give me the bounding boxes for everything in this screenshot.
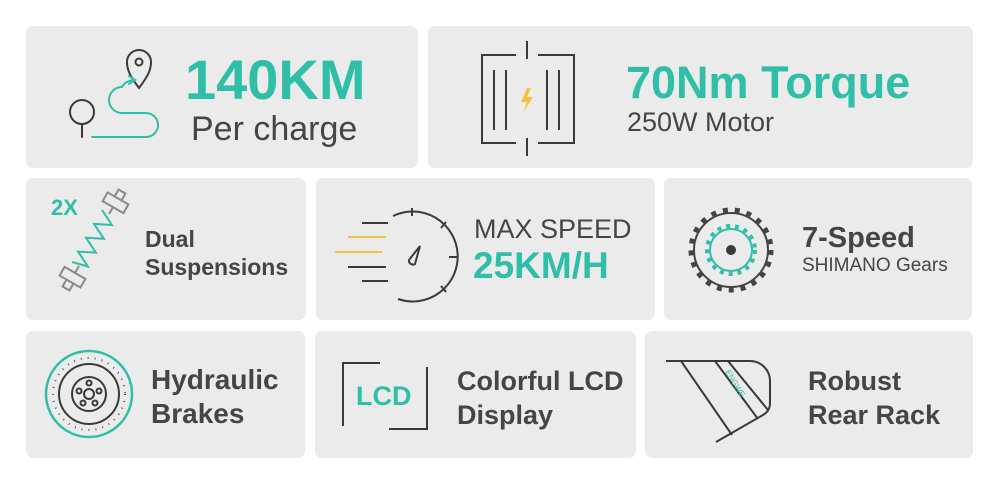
panel: LCD [315, 331, 636, 458]
panel: brakes [26, 331, 305, 458]
text: Dual Suspensions: Dual [145, 226, 195, 252]
icon: speedometer [335, 208, 459, 302]
text: Dual Suspensions [145, 226, 288, 280]
text: Colorful LCD Display: Display [457, 400, 553, 430]
heading: 70Nm Torque: 70Nm Torque [626, 57, 910, 108]
text: Dual Suspensions: Suspensions [145, 254, 288, 280]
text: Colorful LCD Display [457, 366, 623, 430]
text: SHIMANO Gears: SHIMANO Gears [802, 255, 948, 276]
heading: 7-Speed: 7-Speed [802, 222, 915, 254]
text: Hydraulic Brakes [151, 364, 279, 429]
text: Hydraulic Brakes: Hydraulic [151, 364, 279, 395]
text: Hydraulic Brakes: Brakes [151, 398, 244, 429]
heading: 25KM/H: 25KM/H [473, 245, 609, 286]
text: 250W Motor: 250W Motor [627, 107, 774, 137]
icon: spring [58, 188, 130, 292]
icon: motor [481, 41, 575, 156]
text: Robust Rear Rack: Robust [808, 366, 901, 396]
icon: gear [688, 208, 774, 292]
icon: rack [666, 360, 771, 443]
icon: route [69, 49, 159, 138]
panel: rear rack [645, 331, 973, 458]
panel: torque [428, 26, 973, 168]
label: LCD: LCD [356, 381, 412, 411]
panel: gears [664, 178, 972, 320]
text: MAX SPEED: MAX SPEED [474, 214, 632, 244]
panel: suspension [26, 178, 306, 320]
icon: rack: ENGWE [723, 368, 747, 399]
heading: 140KM: 140KM [185, 48, 366, 111]
label: 2X: 2X [51, 195, 78, 220]
text: Robust Rear Rack [808, 366, 940, 430]
text: per charge: Per charge [191, 110, 357, 148]
text: Colorful LCD Display: Colorful LCD [457, 366, 623, 396]
icon: LCD [342, 362, 428, 430]
icon: brake disc [44, 350, 134, 438]
panel: range [26, 26, 418, 168]
text: Robust Rear Rack: Rear Rack [808, 400, 940, 430]
panel: max speed [316, 178, 655, 320]
